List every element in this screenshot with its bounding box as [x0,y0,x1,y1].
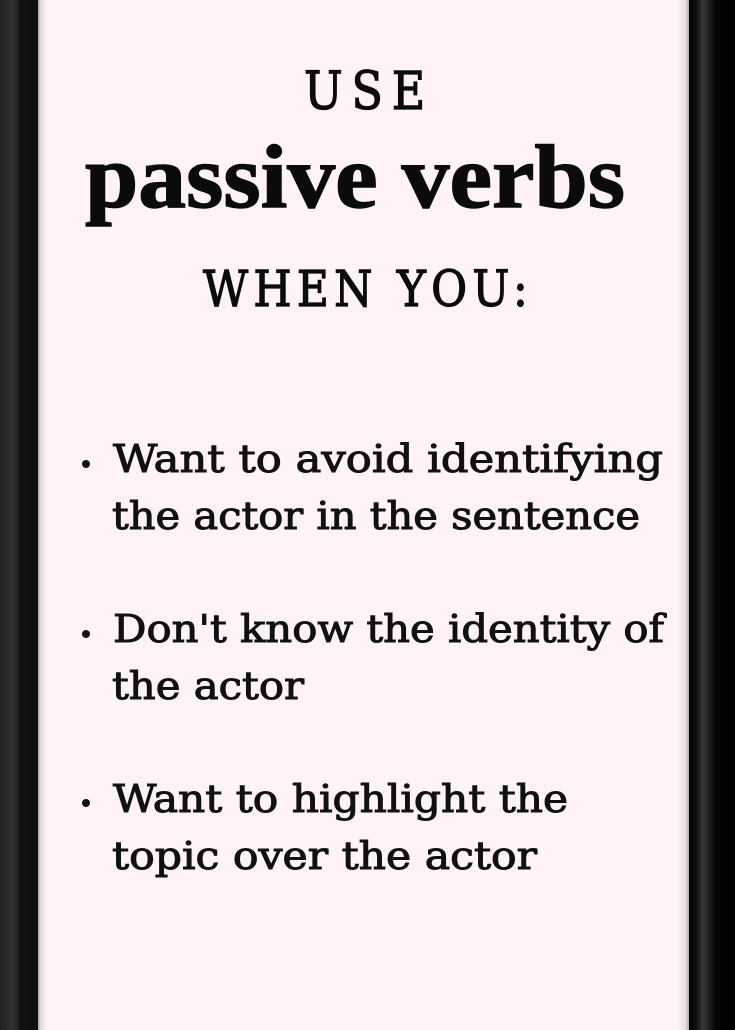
left dark frame [0,0,47,1030]
bullet item: highlight the topic: topic over the actor [112,834,538,878]
bullet list [82,437,667,878]
bullet item: unknown actor: Don't know the identity of [113,607,667,651]
heading: WHEN YOU:: WHEN YOU: [203,260,533,318]
bullet item: unknown actor [82,607,667,708]
bullet item: highlight the topic [82,777,568,878]
bullet item: avoid identifying the actor: Want to avoid identifying [113,437,663,481]
bullet item: avoid identifying the actor [82,437,663,538]
right dark frame [677,0,735,1030]
heading: USE: USE [304,62,434,122]
heading: passive verbs: passive verbs [85,128,625,227]
bullet item: unknown actor: the actor [112,664,305,708]
title [85,62,625,318]
bullet item: avoid identifying the actor: the actor in the sentence [112,494,640,538]
bullet item: highlight the topic: Want to highlight the [113,777,568,821]
